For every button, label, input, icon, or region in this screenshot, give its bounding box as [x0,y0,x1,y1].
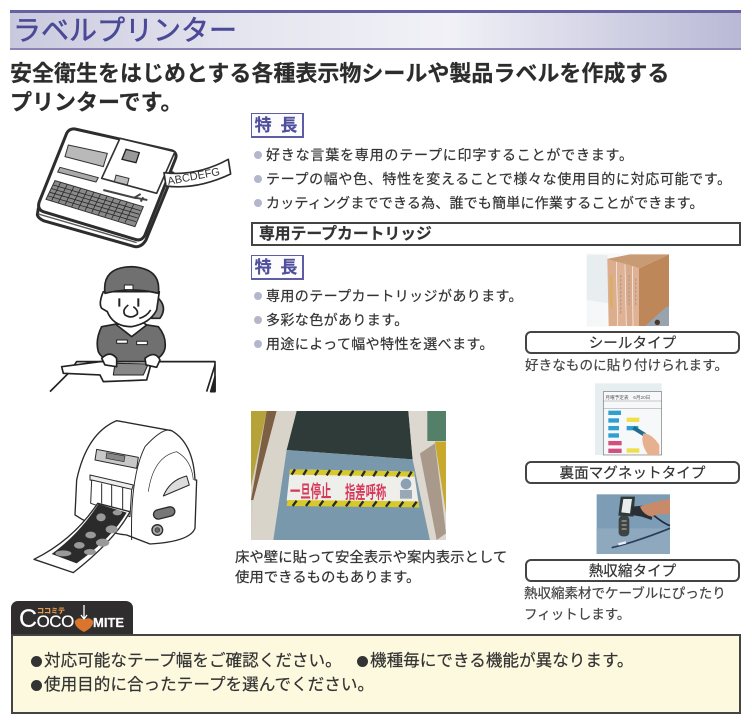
section heading: tape cartridge [251,222,741,246]
logo tab: Coco Mite [11,601,133,634]
note line 2: 使用目的に合ったテープを選んでください。 [44,675,374,694]
photo: floor safety sticker [251,411,446,540]
heat shrink caption: フィットします。 [524,607,630,622]
features badge 1 [251,113,304,138]
intro text: プリンターです。 [10,90,182,115]
floor sticker caption [235,550,507,586]
feature list 1: 好きな言葉を専用のテープに印字することができます。 [266,147,634,163]
intro text: 安全衛生をはじめとする各種表示物シールや製品ラベルを作成する [10,61,669,86]
logo word COCO: COCO [19,605,74,633]
photo: magnetic schedule board [595,383,662,455]
features badge 2 [251,255,304,280]
icon: handheld label printer [37,129,231,247]
logo word MITE: MITE [93,615,124,630]
icon: coco mite heart arrow [75,605,93,632]
floor sticker caption: 床や壁に貼って安全表示や案内表示として [235,550,507,566]
floor sticker caption: 使用できるものもあります。 [235,570,420,586]
heat shrink caption: 熱収縮素材でケーブルにぴったり [524,586,726,601]
seal type label: シールタイプ [589,336,676,352]
magnet type label [525,461,740,484]
features badge 2: 特 長 [255,258,299,277]
feature list 1: カッティングまでできる為、誰でも簡単に作業することができます。 [266,195,704,211]
sticker text: 指差呼称 [345,481,387,503]
magnet type label: 裏面マグネットタイプ [560,466,706,482]
feature list 2: 専用のテープカートリッジがあります。 [266,288,523,304]
heat shrink type label [525,559,740,582]
feature list 2 [254,288,523,352]
logo small katakana: ココミテ [37,608,65,615]
heat shrink caption [524,586,726,622]
icon: handheld label printer: ABCDEFG [167,166,221,188]
note line 1: 対応可能なテープ幅をご確認ください。 [44,651,342,670]
icon: worker using printer [50,267,215,392]
section heading: tape cartridge: 専用テープカートリッジ [259,226,432,243]
icon: desktop label printer [34,421,197,573]
features badge 1: 特 長 [255,116,299,135]
feature list 1 [254,147,732,211]
photo: magnetic schedule board: 月曜予定表 6月20日 [605,394,650,401]
note box [11,634,741,714]
title banner: ラベルプリンター [13,15,237,46]
feature list 2: 多彩な色があります。 [266,312,409,328]
seal type caption: 好きなものに貼り付けられます。 [525,358,728,373]
sticker text: 一旦停止 [290,480,331,502]
photo: binders with labels [587,253,677,327]
heat shrink type label: 熱収縮タイプ [589,564,676,580]
sticker text [290,480,387,503]
seal type label [525,331,740,354]
intro text [10,61,669,115]
title banner [10,10,741,50]
feature list 1: テープの幅や色、特性を変えることで様々な使用目的に対応可能です。 [266,171,732,187]
feature list 2: 用途によって幅や特性を選べます。 [266,336,494,352]
photo: heat shrink cable [597,494,670,554]
note line 1 second item: 機種毎にできる機能が異なります。 [370,651,634,670]
